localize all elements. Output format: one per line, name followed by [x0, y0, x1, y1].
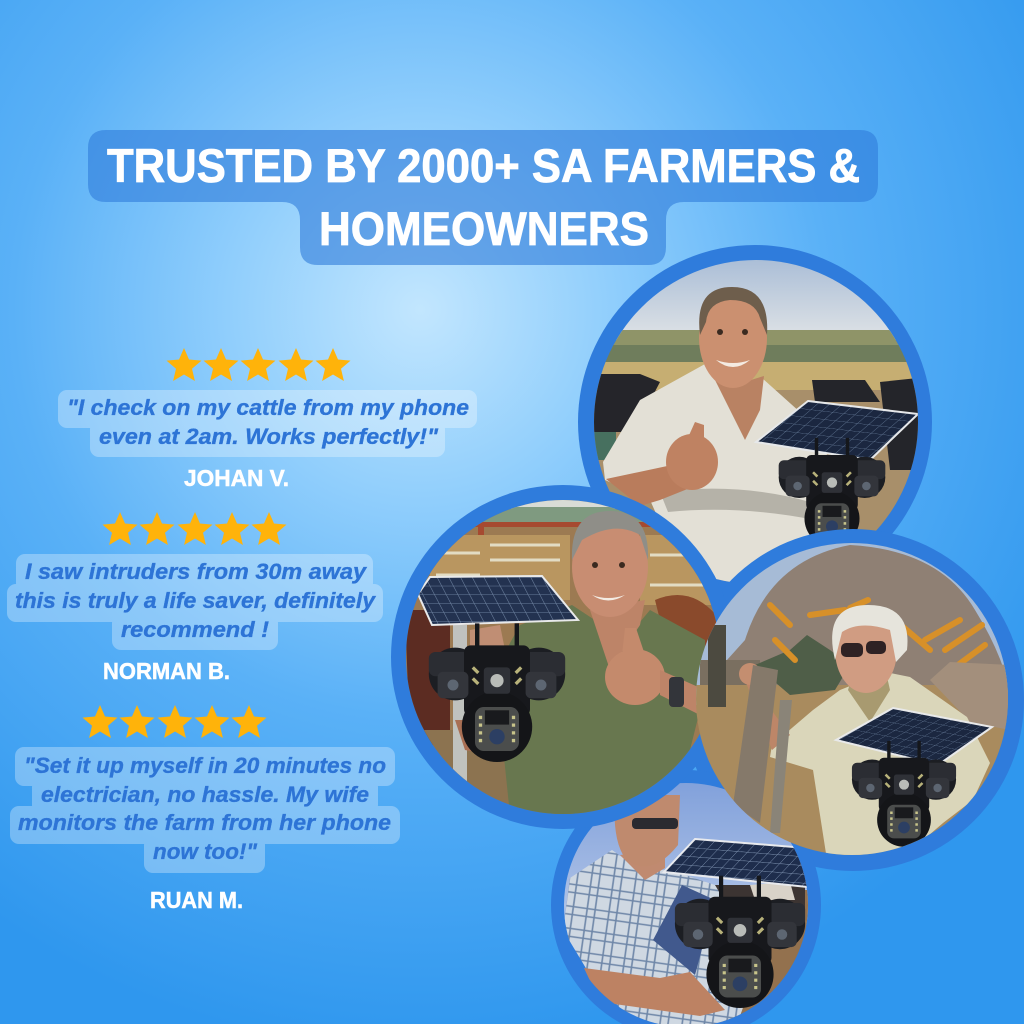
quote text: recommend ! [121, 617, 269, 642]
quote text: "Set it up myself in 20 minutes no [24, 753, 386, 778]
testimonial: Norman B. [7, 512, 383, 684]
quote text [18, 753, 391, 864]
quote text: this is truly a life saver, definitely [15, 588, 377, 613]
ring of photo circle 3 [682, 529, 1024, 871]
author name: NORMAN B. [103, 658, 230, 684]
photo circle 2: farmer in green shirt with thumbs up [391, 485, 735, 829]
author name: RUAN M. [150, 887, 243, 913]
title text: HOMEOWNERS [319, 202, 649, 255]
five stars [166, 348, 350, 381]
title background pill [88, 130, 878, 265]
quote background [10, 747, 400, 873]
testimonial: Johan V. [58, 348, 477, 491]
quote background [7, 554, 383, 650]
title text [107, 139, 860, 255]
title banner [88, 130, 878, 265]
five stars [82, 705, 266, 738]
quote text: "I check on my cattle from my phone [67, 395, 469, 420]
title text: TRUSTED BY 2000+ SA FARMERS & [107, 139, 860, 192]
quote text [67, 395, 469, 449]
quote text: monitors the farm from her phone [18, 810, 391, 835]
quote background [58, 390, 477, 457]
photo circle 3: man with sunglasses and aloes [690, 540, 1015, 860]
photo circle 4: man in plaid shirt [551, 770, 821, 1024]
testimonial: Ruan M. [10, 705, 400, 913]
author name: JOHAN V. [184, 465, 289, 491]
five stars [102, 512, 286, 545]
quote text: now too!" [153, 839, 258, 864]
quote text: I saw intruders from 30m away [25, 559, 368, 584]
photo circle 1: farmer with cattle [578, 245, 932, 599]
quote text: electrician, no hassle. My wife [41, 782, 369, 807]
quote text [15, 559, 377, 642]
quote text: even at 2am. Works perfectly!" [99, 424, 439, 449]
